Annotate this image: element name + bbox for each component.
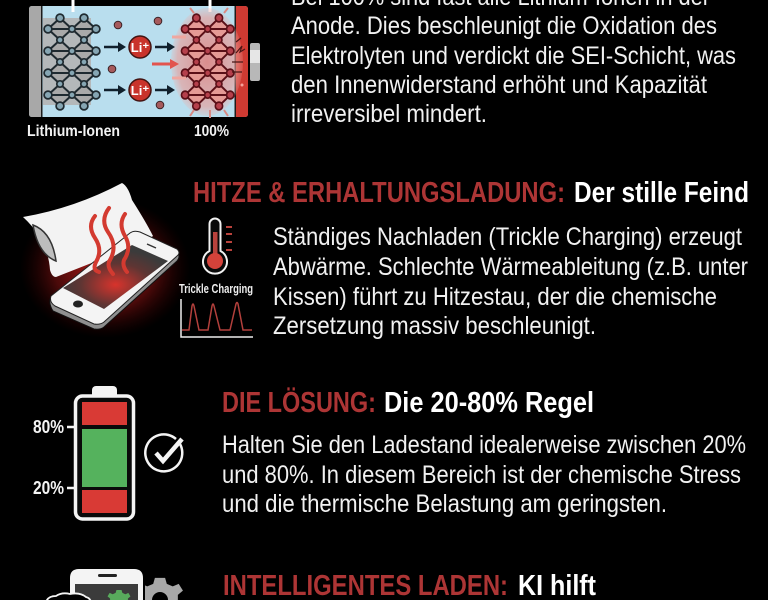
overcharged cathode lattice (171, 8, 243, 118)
text block: overcharge explanation: Anode. Dies beschleunigt die Oxidation des (291, 12, 717, 40)
anode lattice (43, 14, 100, 110)
green gear (108, 590, 130, 600)
icon: battery 20-80 percent (33, 386, 134, 519)
Li+ ion top: Li⁺ (131, 40, 149, 55)
cracks on cathode plate (232, 38, 245, 72)
red zone top (82, 402, 127, 425)
pillow (23, 183, 153, 277)
red heat glow (20, 198, 190, 338)
phone (50, 231, 179, 329)
cathode plate (236, 6, 248, 117)
chart: trickle charging pulses (181, 299, 253, 337)
label: 100%: 100% (194, 123, 229, 140)
heading: heat and trickle charging: HITZE & ERHALTUNGSLADUNG: (193, 177, 565, 209)
wires (73, 0, 210, 12)
heading: the solution: DIE LÖSUNG: (222, 387, 376, 419)
brain (46, 593, 91, 600)
text block: heat explanation (273, 223, 748, 340)
icon: check mark (145, 434, 182, 471)
phone body (69, 568, 144, 600)
heat waves (91, 208, 128, 274)
phone screen (63, 245, 168, 309)
label: 80%: 80% (33, 417, 64, 437)
phone screen (75, 584, 138, 600)
label: Lithium-Ionen: Lithium-Ionen (27, 123, 120, 140)
red zone bottom (82, 490, 127, 513)
text block: heat explanation: Zersetzung massiv beschleunigt. (273, 312, 596, 340)
label: 20%: 20% (33, 478, 64, 498)
green safe zone (82, 429, 127, 487)
text block: solution explanation: und die thermische Belastung am geringsten. (222, 490, 667, 518)
label: Trickle Charging: Trickle Charging (179, 282, 253, 296)
illustration: phone overheating under pillow (20, 183, 190, 338)
illustration: lithium-ion battery cell (29, 0, 260, 118)
icon: thermometer (203, 218, 232, 274)
anode plate (29, 6, 41, 117)
gray gear (137, 578, 183, 600)
icon: smart charging phone with brain and gears (46, 568, 183, 600)
text block: overcharge explanation: den Innenwiderstand erhöht und Kapazität (291, 71, 707, 99)
text block: overcharge explanation (291, 0, 736, 128)
battery terminal (250, 43, 260, 81)
Li+ ion bottom: Li⁺ (131, 83, 149, 98)
text block: solution explanation (222, 431, 746, 518)
battery body with electrolyte (29, 6, 248, 117)
heading accent: Die 20-80% Regel: Die 20-80% Regel (384, 387, 594, 419)
text block: overcharge explanation: irreversibel mindert. (291, 100, 487, 128)
text block: heat explanation: Kissen) führt zu Hitzestau, der die chemische (273, 283, 717, 311)
lithium ion flow (104, 17, 179, 109)
